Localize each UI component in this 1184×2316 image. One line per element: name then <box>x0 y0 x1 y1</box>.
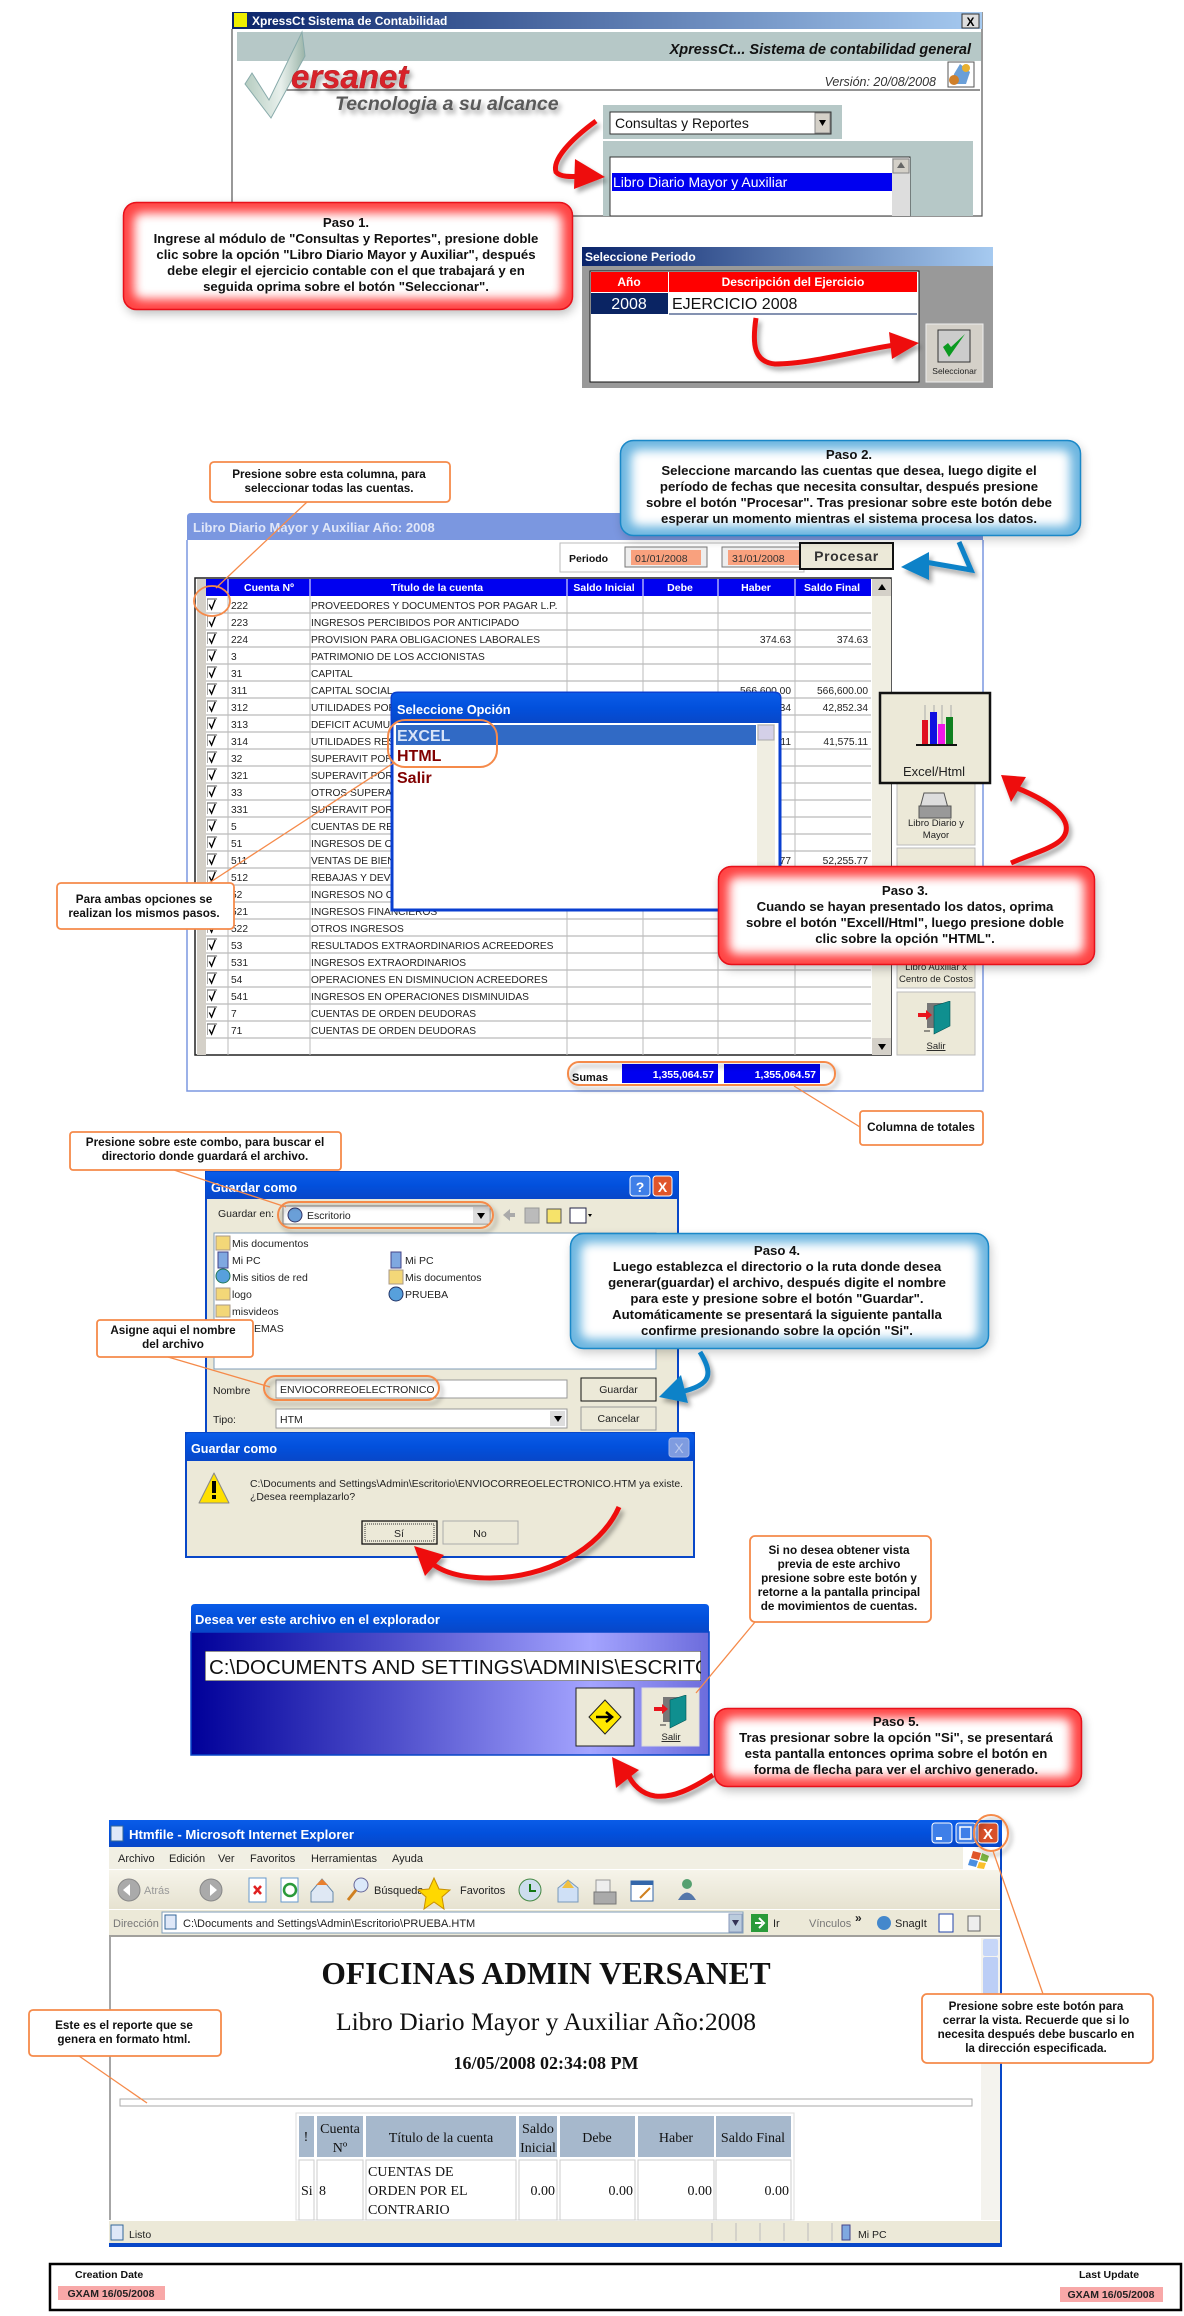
report table: 0.00 <box>608 2184 633 2199</box>
callout: Paso 3: Paso 3. <box>882 883 928 898</box>
IE menu bar: Archivo <box>118 1853 155 1865</box>
button: Procesar <box>800 543 893 569</box>
IE title bar: X <box>983 1826 993 1843</box>
button: Libro Diario y Mayor <box>897 783 975 845</box>
dialog: Guardar como overwrite <box>186 1433 694 1557</box>
file list: EMAS <box>254 1323 284 1335</box>
grid rows: CUENTAS DE ORDEN DEUDORAS <box>311 1026 476 1037</box>
callout: exit hint: presione sobre este botón y <box>761 1572 917 1585</box>
header band <box>237 32 981 61</box>
option: EXCEL: EXCEL <box>397 728 451 745</box>
button: Libro Auxiliar: Centro de Costos <box>899 974 973 985</box>
highlight: file name <box>264 1376 439 1400</box>
creation date: Creation Date <box>75 2269 143 2281</box>
save-in combo <box>218 1206 490 1224</box>
callout: Paso 5 <box>714 1708 1084 1791</box>
IE toolbar: Atrás <box>144 1885 170 1897</box>
grid rows: UTILIDADES POR <box>311 703 396 714</box>
grid rows: 321 <box>231 771 248 782</box>
grid rows: 32 <box>231 754 243 765</box>
report title: OFICINAS ADMIN VERSANET <box>321 1956 771 1991</box>
logo: Versanet checkmark: Tecnologia a su alcance <box>335 93 559 115</box>
grid rows <box>207 599 868 1037</box>
grid header: Haber <box>741 582 771 594</box>
highlight: totals <box>568 1062 835 1085</box>
button: Salir <box>642 1688 699 1746</box>
grid rows: 566,600.00 <box>740 686 791 697</box>
callout: Paso 3: clic sobre la opción "HTML". <box>815 931 995 946</box>
grid rows: 531 <box>231 958 248 969</box>
file type row: HTM <box>280 1414 303 1426</box>
callout: combo hint: directorio donde guardará el archivo. <box>102 1150 308 1163</box>
header band: XpressCt... Sistema de contabilidad general <box>669 42 972 58</box>
window title bar: XpressCt Sistema de Contabilidad <box>252 14 447 28</box>
grid rows: INGRESOS DE O <box>311 839 393 850</box>
dialog: Guardar como save <box>206 1172 678 1434</box>
grid rows: 52,255.77 <box>746 856 791 867</box>
file list: misvideos <box>232 1306 279 1318</box>
grid rows: 331 <box>231 805 248 816</box>
IE status bar <box>109 2221 1002 2247</box>
callout: Paso 3: sobre el botón "Excell/Html", luego presione doble <box>746 915 1064 930</box>
icon: tools <box>948 62 974 87</box>
button: Excel/Html: Excel/Html <box>903 764 965 779</box>
grid rows: 522 <box>231 924 248 935</box>
callout: file name hint <box>97 1320 270 1387</box>
title bar: Guardar como <box>211 1181 297 1195</box>
IE address bar: C:\Documents and Settings\Admin\Escritorio\PRUEBA.HTM <box>183 1918 475 1930</box>
callout: Paso 4: confirme presionando sobre la opción "Si". <box>641 1323 913 1338</box>
grid rows: PROVEEDORES Y DOCUMENTOS POR PAGAR L.P. <box>311 601 557 612</box>
grid rows: INGRESOS FINANCIEROS <box>311 907 437 918</box>
button: Cancelar: Cancelar <box>597 1413 640 1425</box>
IE address bar: Ir <box>773 1918 780 1930</box>
file name row <box>213 1380 567 1398</box>
grid rows: SUPERAVIT POR <box>311 754 393 765</box>
grid rows: DEFICIT ACUMUL <box>311 720 396 731</box>
period table: 2008 <box>611 296 647 313</box>
last update: GXAM 16/05/2008 <box>1068 2289 1155 2301</box>
grid rows: RESULTADOS EXTRAORDINARIOS ACREEDORES <box>311 941 554 952</box>
footer: dates <box>50 2264 1181 2310</box>
period table: Descripción del Ejercicio <box>722 275 864 289</box>
IE address bar: » <box>855 1911 862 1925</box>
button: No: No <box>473 1528 487 1540</box>
callout: Paso 4: para este y presione sobre el botón "Guardar". <box>630 1291 924 1306</box>
IE menu bar <box>109 1847 1002 1869</box>
grid rows: 31 <box>231 669 243 680</box>
arrow: blue to Procesar <box>901 542 971 580</box>
grid header <box>206 579 891 1055</box>
callout: Paso 2: esperar un momento mientras el sistema procesa los datos. <box>661 511 1037 526</box>
grid rows: SUPERAVIT POR <box>311 805 393 816</box>
file list: Mi PC <box>232 1255 261 1267</box>
callout: Paso 2 <box>620 440 1083 540</box>
grid rows: SUPERAVIT POR <box>311 771 393 782</box>
grid rows: 71 <box>231 1026 243 1037</box>
button: Libro Diario y Mayor: Libro Diario y <box>908 818 964 829</box>
arrow: red to Excel/Html <box>1001 775 1066 863</box>
data grid <box>195 578 891 1055</box>
grid rows: 52,255.77 <box>823 856 868 867</box>
button: Libro Auxiliar: Libro Auxiliar x <box>905 962 967 973</box>
report table: Título de la cuenta <box>389 2131 494 2146</box>
dialog: Seleccione Opción: Seleccione Opción <box>397 703 511 717</box>
IE address bar: Vínculos <box>809 1918 852 1930</box>
file list: Mis documentos <box>232 1238 308 1250</box>
callout: select all accounts <box>210 462 450 588</box>
grid header: Cuenta Nº <box>244 582 294 594</box>
window title <box>187 513 983 540</box>
dialog: Seleccione Periodo: Seleccione Periodo <box>585 250 696 264</box>
save-in combo: Guardar en: <box>218 1208 274 1220</box>
grid rows: 7 <box>231 1009 237 1020</box>
file type row: Tipo: <box>213 1414 236 1426</box>
totals row: Sumas <box>572 1072 608 1084</box>
button: Sí <box>362 1521 437 1544</box>
button: Guardar <box>581 1378 656 1401</box>
report table: Si <box>301 2184 313 2199</box>
file name row: ENVIOCORREOELECTRONICO <box>280 1384 435 1396</box>
side buttons <box>880 693 990 1055</box>
version line: Versión: 20/08/2008 <box>825 75 936 89</box>
option list panel: Libro Diario Mayor y Auxiliar <box>613 174 788 190</box>
overwrite message: C:\Documents and Settings\Admin\Escritorio\ENVIOCORREOELECTRONICO.HTM ya existe. <box>250 1479 683 1490</box>
callout: exit hint: de movimientos de cuentas. <box>761 1600 917 1613</box>
button: Libro Diario y Mayor: Mayor <box>923 830 949 841</box>
grid rows: 311 <box>231 686 248 697</box>
callout: Paso 3 <box>718 866 1097 969</box>
creation date: GXAM 16/05/2008 <box>68 2288 155 2300</box>
last update: Last Update <box>1079 2269 1139 2281</box>
callout: Paso 1 <box>123 202 575 314</box>
period table <box>590 271 919 382</box>
callout: Paso 4 <box>570 1233 991 1353</box>
option: EXCEL <box>396 725 756 745</box>
grid rows: CAPITAL <box>311 669 353 680</box>
grid rows: 51 <box>231 839 243 850</box>
report table: CUENTAS DE <box>368 2165 454 2180</box>
window title: Libro Diario Mayor y Auxiliar Año: 2008 <box>193 520 435 535</box>
callout: exit hint: retorne a la pantalla principal <box>758 1586 920 1599</box>
file name row: Nombre <box>213 1385 251 1397</box>
callout: both options: realizan los mismos pasos. <box>68 907 220 920</box>
report date: 16/05/2008 02:34:08 PM <box>454 2053 638 2073</box>
grid rows: 224 <box>231 635 248 646</box>
save-in combo: Escritorio <box>307 1210 351 1222</box>
grid rows: 511 <box>231 856 248 867</box>
scrollbar <box>981 1938 1001 2220</box>
grid rows: CUENTAS DE ORDEN DEUDORAS <box>311 1009 476 1020</box>
option: HTML: HTML <box>397 748 442 765</box>
grid rows: INGRESOS NO C <box>311 890 393 901</box>
dialog: Guardar como overwrite: Guardar como <box>191 1442 277 1456</box>
callout: column totals <box>794 1086 983 1145</box>
callout: Paso 5: esta pantalla entonces oprima sobre el botón en <box>745 1746 1047 1761</box>
grid rows: 52 <box>231 890 243 901</box>
callout: Paso 4: generar(guardar) el archivo, después digite el nombre <box>608 1275 946 1290</box>
callout: Paso 2: sobre el botón "Procesar". Tras presionar sobre este botón debe <box>646 495 1052 510</box>
dialog: Guardar como overwrite: X <box>674 1440 684 1456</box>
period filter <box>560 543 804 572</box>
report table: Haber <box>659 2131 693 2146</box>
button: Salir: Salir <box>926 1041 946 1052</box>
callout: exit hint: Si no desea obtener vista <box>769 1544 910 1557</box>
report table: Inicial <box>520 2141 556 2156</box>
callout: Paso 1: clic sobre la opción "Libro Diario Mayor y Auxiliar", después <box>156 247 536 262</box>
grid rows: 222 <box>231 601 248 612</box>
callout: close hint: la dirección especificada. <box>965 2042 1107 2055</box>
grid header: Debe <box>667 582 693 594</box>
button: blank behind callout <box>897 848 975 878</box>
grid rows: UTILIDADES RES <box>311 737 395 748</box>
file list: Mis sitios de red <box>232 1272 308 1284</box>
toolbar icons <box>503 1208 592 1223</box>
option list panel <box>603 141 973 216</box>
report table: 0.00 <box>530 2184 555 2199</box>
callout: Paso 4: Luego establezca el directorio o la ruta donde desea <box>613 1259 942 1274</box>
file list: Mis documentos <box>405 1272 481 1284</box>
grid rows: CAPITAL SOCIAL <box>311 686 393 697</box>
grid rows: OTROS INGRESOS <box>311 924 404 935</box>
window title bar: X <box>966 15 975 29</box>
totals row: 1,355,064.57 <box>653 1069 714 1081</box>
title bar: ? <box>636 1179 644 1195</box>
button: Libro Auxiliar <box>897 950 975 988</box>
button: Guardar: Guardar <box>599 1384 638 1396</box>
period filter: Periodo <box>569 553 608 565</box>
file list: Mi PC <box>405 1255 434 1267</box>
window: XpressCt main <box>232 12 982 216</box>
callout: column totals: Columna de totales <box>867 1121 975 1134</box>
report subtitle: Libro Diario Mayor y Auxiliar Año:2008 <box>336 2007 756 2036</box>
callout: Paso 5: Tras presionar sobre la opción "Si", se presentará <box>739 1730 1054 1745</box>
window title bar <box>232 12 982 29</box>
grid header: Saldo Final <box>804 582 860 594</box>
callout: file name hint: del archivo <box>142 1338 204 1351</box>
IE address bar <box>109 1910 1002 1937</box>
callout: Paso 3: Cuando se hayan presentado los datos, oprima <box>757 899 1054 914</box>
last update <box>1060 2269 1163 2302</box>
IE menu bar: Ayuda <box>392 1853 424 1865</box>
callout: combo hint <box>70 1132 341 1207</box>
grid rows: 41,575.11 <box>823 737 868 748</box>
report table <box>296 2113 794 2220</box>
grid rows: CUENTAS DE RE <box>311 822 393 833</box>
callout: both options: Para ambas opciones se <box>76 893 213 906</box>
IE menu bar: Herramientas <box>311 1853 378 1865</box>
callout: Paso 4: Paso 4. <box>754 1243 800 1258</box>
callout: close hint: necesita después debe buscarlo en <box>938 2028 1134 2041</box>
grid rows: 314 <box>231 737 248 748</box>
grid rows: 541 <box>231 992 248 1003</box>
callout: Paso 5: forma de flecha para ver el archivo generado. <box>754 1762 1038 1777</box>
highlight: close button <box>974 1815 1008 1851</box>
grid rows: 223 <box>231 618 248 629</box>
icon: warning <box>199 1473 229 1503</box>
button: Cancelar <box>581 1407 656 1430</box>
grid rows: 42,852.34 <box>746 703 791 714</box>
report table: CONTRARIO <box>368 2203 450 2218</box>
button: Excel/Html <box>880 693 990 783</box>
callout: exit hint: previa de este archivo <box>778 1558 900 1571</box>
creation date <box>58 2269 165 2300</box>
dialog: Seleccione Periodo <box>582 247 993 388</box>
totals row: 1,355,064.57 <box>755 1069 816 1081</box>
grid rows: INGRESOS EXTRAORDINARIOS <box>311 958 466 969</box>
callout: Paso 1: Paso 1. <box>323 215 369 230</box>
grid rows: 374.63 <box>760 635 791 646</box>
IE menu bar: Edición <box>169 1853 205 1865</box>
totals row <box>572 1064 820 1084</box>
grid rows: 374.63 <box>837 635 868 646</box>
IE toolbar: Búsqueda <box>374 1885 424 1897</box>
report table: Saldo <box>522 2122 554 2137</box>
IE title bar: Htmfile - Microsoft Internet Explorer <box>129 1827 354 1842</box>
callout: close hint: cerrar la vista. Recuerde que si lo <box>943 2014 1129 2027</box>
grid rows: 3 <box>231 652 237 663</box>
period table: EJERCICIO 2008 <box>672 296 797 313</box>
callout: html report: Este es el reporte que se <box>55 2019 193 2032</box>
grid rows: 54 <box>231 975 243 986</box>
grid rows: 313 <box>231 720 248 731</box>
callout: select all accounts: seleccionar todas las cuentas. <box>245 482 413 495</box>
logo: Versanet checkmark: ersanet <box>291 58 410 95</box>
file list <box>214 1233 656 1369</box>
callout: close hint: Presione sobre este botón para <box>949 2000 1124 2013</box>
button: Seleccionar: Seleccionar <box>932 366 977 376</box>
button: Sí: Sí <box>394 1528 404 1540</box>
grid rows: OTROS SUPERA <box>311 788 392 799</box>
dialog: view in explorer <box>191 1604 747 1755</box>
grid rows: 512 <box>231 873 248 884</box>
callout: html report: genera en formato html. <box>57 2033 191 2046</box>
report table: Debe <box>582 2131 612 2146</box>
grid rows: INGRESOS EN OPERACIONES DISMINUIDAS <box>311 992 529 1003</box>
period table: Año <box>617 275 641 289</box>
report table: 0.00 <box>764 2184 789 2199</box>
IE address bar: Dirección <box>113 1918 159 1930</box>
highlight: check column <box>194 586 230 616</box>
IE status bar: Mi PC <box>858 2229 887 2241</box>
grid rows: 5 <box>231 822 237 833</box>
title bar: X <box>658 1179 668 1195</box>
period filter: 31/01/2008 <box>732 553 785 565</box>
logo: Versanet checkmark <box>245 32 559 118</box>
IE toolbar: Favoritos <box>460 1885 506 1897</box>
grid header: Saldo Inicial <box>573 582 635 594</box>
callout: Paso 2: Paso 2. <box>826 447 872 462</box>
button: No <box>443 1521 518 1544</box>
file list: PRUEBA <box>405 1289 448 1301</box>
button: Seleccionar <box>926 324 983 382</box>
callout: Paso 2: Seleccione marcando las cuentas que desea, luego digite el <box>661 463 1037 478</box>
overwrite message: ¿Desea reemplazarlo? <box>250 1492 355 1503</box>
callout: close hint <box>922 1851 1153 2063</box>
grid rows: 521 <box>231 907 248 918</box>
grid rows: REBAJAS Y DEV <box>311 873 391 884</box>
callout: both options <box>57 762 395 929</box>
window: Internet Explorer <box>109 1815 1008 2247</box>
grid rows: INGRESOS PERCIBIDOS POR ANTICIPADO <box>311 618 519 629</box>
report table: ! <box>304 2130 308 2145</box>
report table: ORDEN POR EL <box>368 2184 468 2199</box>
report table: Saldo Final <box>721 2131 785 2146</box>
grid rows: 53 <box>231 941 243 952</box>
callout: Paso 5: Paso 5. <box>873 1714 919 1729</box>
IE page content <box>110 1937 1001 2220</box>
button: Procesar: Procesar <box>814 548 879 564</box>
callout: file name hint: Asigne aqui el nombre <box>110 1324 236 1337</box>
arrow: red to go button <box>612 1757 713 1796</box>
path input: C:\DOCUMENTS AND SETTINGS\ADMINIS\ESCRITORIO <box>209 1656 747 1679</box>
report table: 8 <box>319 2184 326 2199</box>
arrow: blue to Guardar <box>659 1352 708 1403</box>
grid rows: 41,575.11 <box>746 737 791 748</box>
grid header: Título de la cuenta <box>391 582 483 594</box>
grid rows: 33 <box>231 788 243 799</box>
option: Salir: Salir <box>397 770 432 787</box>
window: Libro Diario Mayor y Auxiliar <box>187 513 990 1091</box>
period filter: 01/01/2008 <box>635 553 688 565</box>
title bar <box>206 1172 678 1199</box>
callout: Paso 2: período de fechas que necesita consultar, después presione <box>660 479 1038 494</box>
module combo panel: Consultas y Reportes <box>615 115 749 131</box>
grid rows: VENTAS DE BIEN <box>311 856 395 867</box>
grid rows: 42,852.34 <box>823 703 868 714</box>
grid rows: OPERACIONES EN DISMINUCION ACREEDORES <box>311 975 548 986</box>
button: Salir <box>897 992 975 1055</box>
arrow: red to button <box>754 318 919 364</box>
report table: Cuenta <box>320 2122 361 2137</box>
report table: Nº <box>333 2141 348 2156</box>
arrow: red to Sí <box>414 1507 619 1578</box>
dialog: Seleccione Opción <box>392 693 780 910</box>
callout: Paso 1: debe elegir el ejercicio contable con el que trabajará y en <box>167 263 525 278</box>
IE address bar: SnagIt <box>895 1918 927 1930</box>
IE title bar <box>109 1820 1002 1847</box>
callout: Paso 1: seguida oprima sobre el botón "Seleccionar". <box>203 279 489 294</box>
IE toolbar <box>109 1870 1002 1909</box>
callout: html report <box>29 2010 221 2103</box>
callout: combo hint: Presione sobre este combo, para buscar el <box>86 1136 324 1149</box>
grid rows: PROVISION PARA OBLIGACIONES LABORALES <box>311 635 540 646</box>
grid rows: PATRIMONIO DE LOS ACCIONISTAS <box>311 652 485 663</box>
IE menu bar: Ver <box>218 1853 235 1865</box>
IE menu bar: Favoritos <box>250 1853 296 1865</box>
dialog: view in explorer: Desea ver este archivo en el explorador <box>195 1612 440 1627</box>
button: Salir: Salir <box>661 1732 681 1743</box>
highlight: save-in combo <box>278 1202 493 1228</box>
IE status bar: Listo <box>129 2229 151 2241</box>
callout: Paso 4: Automáticamente se presentará la siguiente pantalla <box>612 1307 943 1322</box>
button: go arrow <box>576 1688 634 1746</box>
grid rows: 566,600.00 <box>817 686 868 697</box>
file list: logo <box>232 1289 252 1301</box>
callout: select all accounts: Presione sobre esta columna, para <box>232 468 426 481</box>
report table: 0.00 <box>688 2184 712 2199</box>
callout: Paso 1: Ingrese al módulo de "Consultas y Reportes", presione doble <box>154 231 538 246</box>
highlight: EXCEL/HTML <box>388 720 497 767</box>
grid rows: 312 <box>231 703 248 714</box>
module combo panel <box>603 105 842 139</box>
arrow: red to list <box>555 121 605 189</box>
file type row <box>213 1409 567 1428</box>
callout: exit hint <box>696 1536 931 1693</box>
